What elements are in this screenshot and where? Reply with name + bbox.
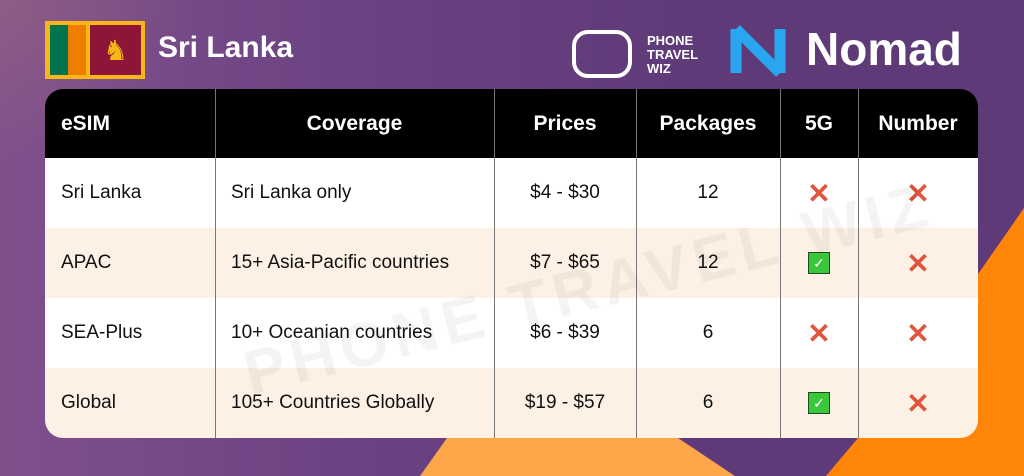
flag: Sri Lanka: ♞ [103, 34, 128, 66]
logo: Nomad: Nomad [806, 23, 962, 75]
row: Sri Lanka: ✕ [807, 178, 831, 208]
title: Sri Lanka [158, 31, 293, 64]
row: APAC: ✕ [906, 248, 930, 278]
row: Global: 6 [703, 392, 713, 413]
header row: Packages [660, 112, 756, 134]
row: SEA-Plus [45, 298, 978, 368]
row: Sri Lanka [45, 158, 978, 228]
row: APAC: 15+ Asia-Pacific countries [231, 252, 449, 273]
row: Global [45, 368, 978, 438]
header row: Coverage [307, 112, 402, 134]
logo: Nomad [730, 23, 962, 77]
row: SEA-Plus: 10+ Oceanian countries [231, 322, 432, 343]
table [45, 89, 978, 438]
logo: phone travel wiz: PHONE [647, 33, 693, 48]
watermark: PHONE TRAVEL WIZ [237, 171, 940, 408]
header row [45, 89, 978, 158]
row: SEA-Plus: ✕ [906, 318, 930, 348]
row: APAC: $7 - $65 [530, 252, 600, 273]
row: APAC: ✓ [813, 254, 825, 270]
flag: Sri Lanka [45, 21, 145, 79]
row: Sri Lanka: Sri Lanka only [231, 182, 351, 203]
logo: phone travel wiz [572, 30, 698, 78]
header row: Prices [533, 112, 597, 134]
row: SEA-Plus: ✕ [807, 318, 831, 348]
row: Global: 105+ Countries Globally [231, 392, 434, 413]
row: APAC [45, 228, 978, 298]
row: Global: $19 - $57 [525, 392, 605, 413]
row: SEA-Plus: SEA-Plus [61, 322, 142, 343]
header row: eSIM [61, 112, 110, 134]
header row: 5G [805, 112, 833, 134]
row: SEA-Plus: $6 - $39 [530, 322, 600, 343]
row: Global: ✕ [906, 388, 930, 418]
row: Sri Lanka: $4 - $30 [530, 182, 600, 203]
header row: Number [878, 112, 958, 134]
row: APAC: APAC [61, 252, 111, 273]
row: APAC: 12 [697, 252, 719, 273]
row: Sri Lanka: 12 [697, 182, 719, 203]
row: Sri Lanka: Sri Lanka [61, 182, 141, 203]
row: Sri Lanka: ✕ [906, 178, 930, 208]
row: Global: Global [61, 392, 116, 413]
logo: phone travel wiz: TRAVEL [647, 47, 698, 62]
row: SEA-Plus: 6 [703, 322, 713, 343]
logo: phone travel wiz: WIZ [647, 61, 671, 76]
row: Global: ✓ [813, 394, 825, 410]
